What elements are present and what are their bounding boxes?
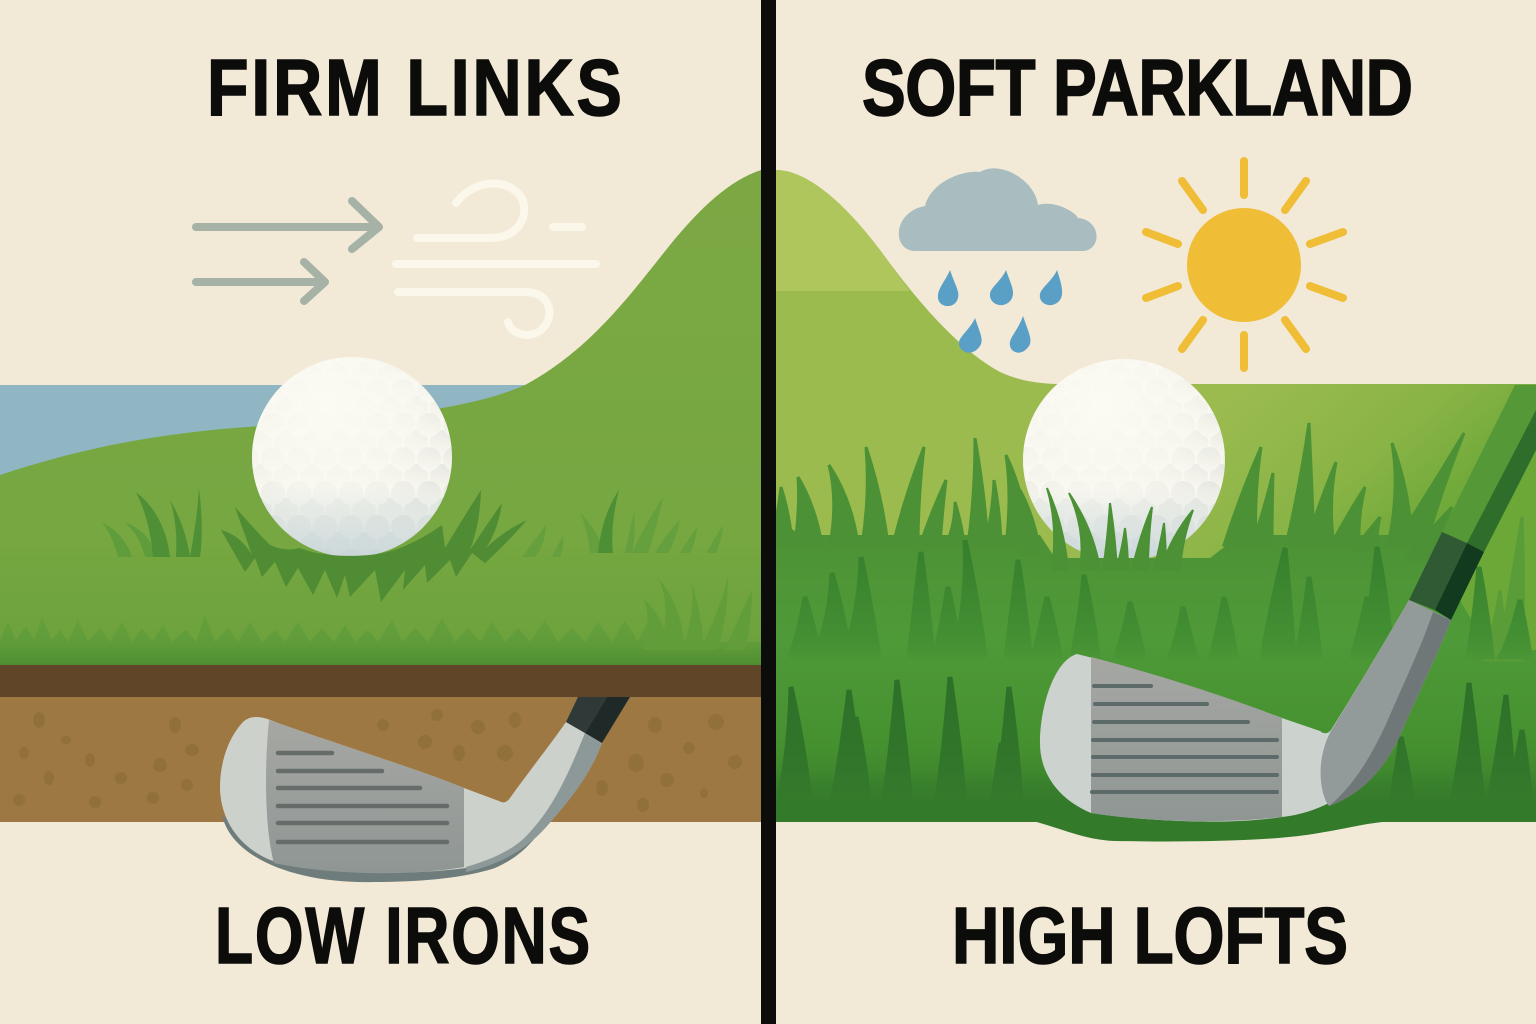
high loft club bbox=[1040, 532, 1484, 822]
divider bbox=[761, 0, 776, 1024]
club body bbox=[220, 717, 602, 873]
grass body bbox=[776, 517, 1536, 822]
corner grass tuft bbox=[643, 577, 752, 650]
right grass tufts bbox=[522, 490, 723, 557]
heading: soft parkland: SOFT PARKLAND bbox=[862, 43, 1413, 132]
sun bbox=[1146, 161, 1343, 368]
club body bbox=[1040, 600, 1451, 822]
left grass tuft bbox=[102, 488, 202, 557]
hosel shade bbox=[466, 733, 602, 872]
turf bulge bbox=[1033, 821, 1396, 841]
parkland hill bbox=[776, 170, 1536, 822]
rain drops bbox=[938, 270, 1062, 353]
sea bbox=[0, 385, 540, 480]
lower grass blades bbox=[776, 677, 1532, 815]
hosel bbox=[1321, 600, 1451, 806]
low iron club bbox=[220, 697, 630, 882]
wind arrows bbox=[196, 201, 379, 301]
hill sunlit top bbox=[776, 170, 910, 291]
club sole bbox=[222, 790, 560, 882]
rear grass blades bbox=[770, 423, 1464, 560]
grass base bbox=[776, 770, 1536, 822]
heading: firm links: FIRM LINKS bbox=[207, 43, 622, 132]
club grip collar bbox=[1409, 532, 1484, 620]
hosel shade bbox=[1329, 612, 1451, 806]
wind swirls bbox=[396, 184, 596, 335]
golf ball bbox=[252, 357, 452, 557]
grooves bbox=[1092, 686, 1277, 792]
label: low irons: LOW IRONS bbox=[215, 892, 590, 981]
soil top layer bbox=[0, 665, 761, 697]
golf ball bbox=[1023, 359, 1225, 561]
grooves bbox=[278, 753, 447, 842]
middle grass blades bbox=[790, 540, 1530, 657]
club face bbox=[266, 720, 464, 873]
links hill bbox=[0, 170, 761, 670]
panel: soft parkland bbox=[770, 161, 1536, 841]
grass over ball bbox=[1047, 488, 1193, 570]
soil bbox=[0, 697, 761, 822]
grass around ball bbox=[221, 490, 527, 602]
cloud bbox=[899, 168, 1097, 251]
label: high lofts: HIGH LOFTS bbox=[952, 891, 1348, 980]
right side blades bbox=[1485, 517, 1524, 660]
grass edge bbox=[0, 615, 761, 665]
club grip collar bbox=[566, 697, 630, 743]
soil speckles bbox=[13, 709, 742, 812]
club shaft bbox=[1442, 385, 1536, 552]
club face bbox=[1091, 657, 1282, 821]
panel: firm links bbox=[0, 170, 761, 882]
